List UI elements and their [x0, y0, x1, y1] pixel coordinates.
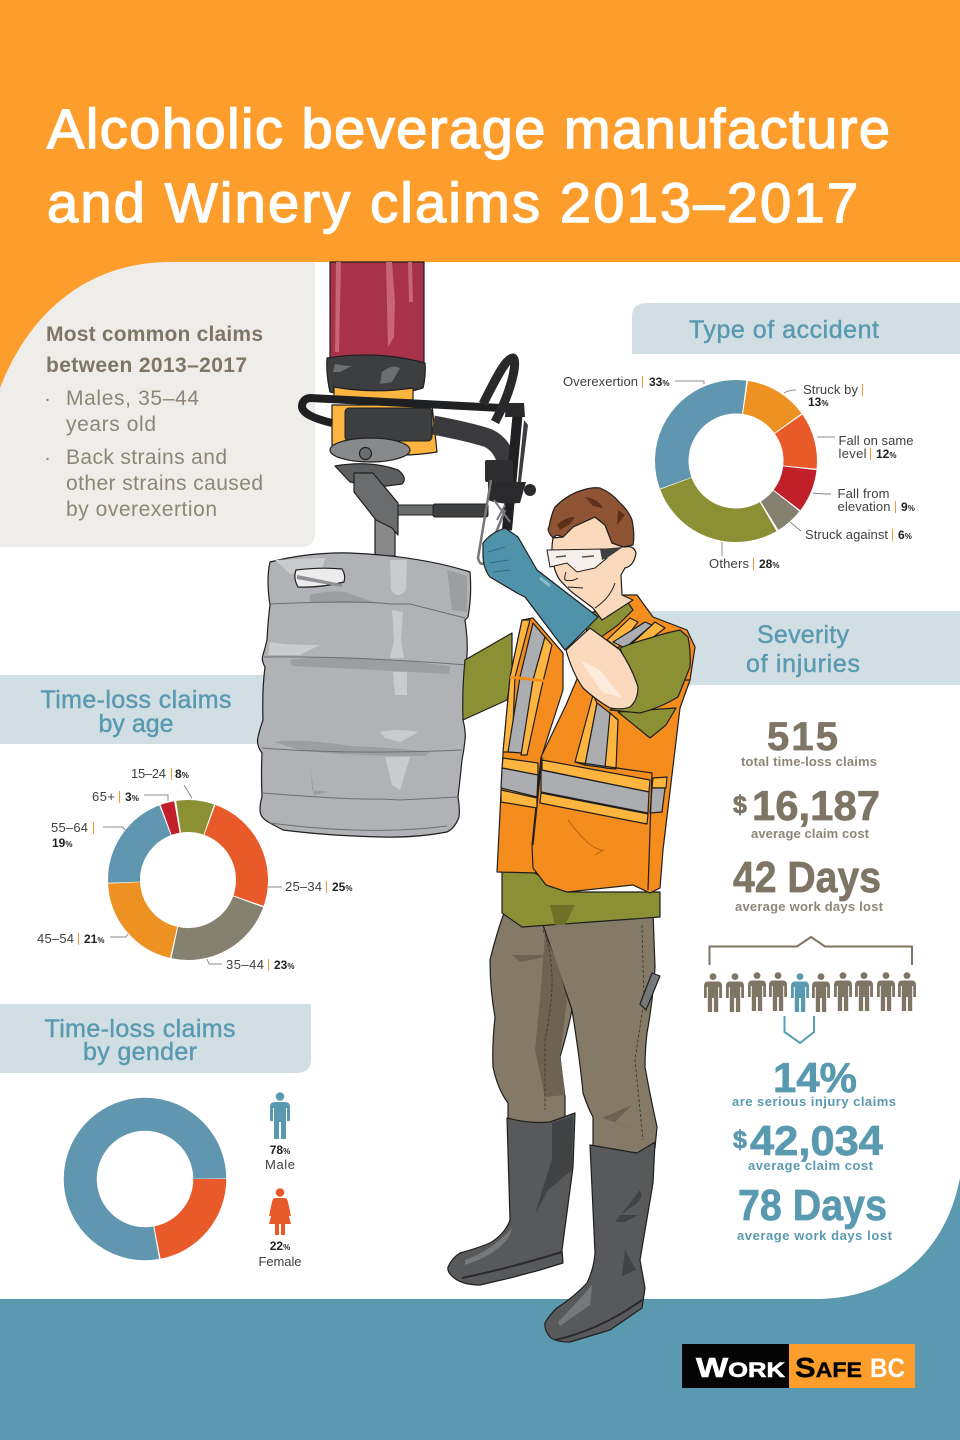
labels: claims by age [37, 766, 352, 972]
stats: all time-loss claims: 16,187 [752, 782, 880, 829]
labels: type of accident: Struck by [803, 382, 858, 397]
illustration: bare forearm [566, 628, 638, 709]
labels: claims by age: 23% [274, 958, 294, 972]
labels: claims by age: 15–24 [131, 766, 166, 781]
labels: claims by age: 8% [175, 767, 189, 781]
heading: severity of injuries: Severity [757, 621, 850, 649]
panel: most common claims: by overexertion [66, 498, 217, 521]
stats: all time-loss claims: 515 [767, 715, 838, 759]
illustration: right boot [545, 1142, 655, 1342]
donut chart: claims by age [106, 798, 270, 962]
labels: claims by age: 3% [125, 790, 139, 804]
heading: time-loss claims by gender: by gender [83, 1038, 197, 1066]
labels: type of accident: 9% [901, 500, 915, 514]
icon: female figure [269, 1188, 291, 1235]
logo: WorkSafeBC: SAFE [795, 1352, 862, 1383]
labels: claims by age: 35–44 [226, 957, 264, 972]
panel: most common claims: other strains caused [66, 472, 263, 495]
labels: claims by age: 25–34 [285, 879, 322, 894]
label: female share: Female [258, 1254, 302, 1269]
labels: type of accident: Overexertion [563, 374, 638, 389]
icon: male figure [270, 1092, 290, 1139]
illustration: vacuum lifter [302, 262, 536, 564]
panel: most common claims: Most common claims [46, 323, 263, 346]
stats: all time-loss claims: total time-loss claims [741, 754, 877, 769]
heading: time-loss claims by gender [0, 1004, 311, 1073]
panel: most common claims: Males, 35–44 [66, 387, 199, 410]
labels: type of accident: Fall on same [838, 433, 914, 448]
logo: WorkSafeBC [682, 1344, 915, 1388]
stats: all time-loss claims: $ [733, 791, 747, 819]
heading: severity of injuries [640, 611, 960, 685]
title: Alcoholic beverage manufacture [47, 97, 890, 160]
panel: most common claims: years old [66, 413, 156, 436]
illustration: worker shirt [463, 598, 660, 927]
illustration: blue glove [483, 528, 598, 650]
labels: type of accident: 33% [649, 375, 669, 389]
illustration: high-visibility vest [497, 595, 695, 893]
stats: all time-loss claims: 42 Days [733, 853, 881, 902]
labels: type of accident: elevation [838, 499, 890, 514]
labels: claims by age: 21% [84, 932, 104, 946]
panel: most common claims [0, 262, 315, 547]
title [47, 97, 890, 234]
stats: serious injury claims: 78 Days [738, 1181, 887, 1230]
heading: time-loss claims by age: by age [98, 710, 174, 738]
donut chart: type of accident [646, 371, 826, 551]
label: male share [265, 1143, 295, 1172]
label: male share: Male [265, 1157, 295, 1172]
labels: claims by age: 45–54 [37, 931, 74, 946]
logo: WorkSafeBC: BC [870, 1353, 905, 1383]
panel: most common claims: between 2013–2017 [46, 354, 247, 377]
labels: claims by age: 55–64 [51, 820, 88, 835]
illustration: left boot [448, 1113, 575, 1285]
labels: type of accident: 13% [808, 395, 828, 409]
heading: time-loss claims by gender: Time-loss claims [44, 1015, 236, 1043]
heading: time-loss claims by age [0, 675, 270, 744]
labels: type of accident: 12% [876, 447, 896, 461]
label: female share [258, 1239, 302, 1269]
label: male share: 78% [270, 1143, 290, 1157]
stats: serious injury claims: average work days lost [737, 1228, 893, 1243]
labels: type of accident: 6% [898, 528, 912, 542]
stats: all time-loss claims [733, 715, 884, 914]
illustration: worker trousers [490, 910, 657, 1158]
illustration: worker right sleeve [610, 630, 690, 713]
label: female share: 22% [270, 1239, 290, 1253]
arrow: down to serious claims [784, 1016, 814, 1043]
labels: type of accident [563, 374, 915, 571]
heading: type of accident [632, 303, 960, 354]
heading: type of accident: Type of accident [689, 316, 879, 344]
labels: type of accident: 28% [759, 557, 779, 571]
stats: serious injury claims: are serious injury claims [732, 1094, 896, 1109]
stats: all time-loss claims: average claim cost [751, 826, 870, 841]
illustration: worker head [547, 488, 636, 620]
stats: all time-loss claims: average work days lost [735, 899, 884, 914]
stats: serious injury claims: $ [733, 1126, 747, 1154]
footer band [0, 1178, 960, 1440]
labels: claims by age: 25% [332, 880, 352, 894]
heading: time-loss claims by age: Time-loss claims [40, 686, 232, 714]
bracket: all workers [710, 937, 912, 965]
logo: WorkSafeBC: W ORK [696, 1352, 785, 1383]
illustration: keg [258, 553, 471, 837]
heading: severity of injuries: of injuries [746, 650, 860, 678]
labels: type of accident: Fall from [838, 486, 890, 501]
stats: serious injury claims: 42,034 [750, 1117, 884, 1164]
illustration: pocket tool [640, 973, 660, 1010]
panel: most common claims: Back strains and [66, 446, 227, 469]
labels: type of accident: Struck against [805, 527, 888, 542]
labels: type of accident: level [838, 446, 867, 461]
header band [0, 0, 960, 402]
stats: serious injury claims [732, 1054, 896, 1243]
donut chart: claims by gender [70, 1104, 220, 1254]
labels: type of accident: Others [709, 556, 750, 571]
stats: serious injury claims: average claim cost [748, 1158, 874, 1173]
labels: claims by age: 65+ [92, 789, 115, 804]
title: and Winery claims 2013–2017 [47, 171, 858, 234]
stats: serious injury claims: 14% [773, 1054, 857, 1101]
labels: claims by age: 19% [52, 836, 72, 850]
icon row: ten people, one highlighted [704, 972, 916, 1012]
